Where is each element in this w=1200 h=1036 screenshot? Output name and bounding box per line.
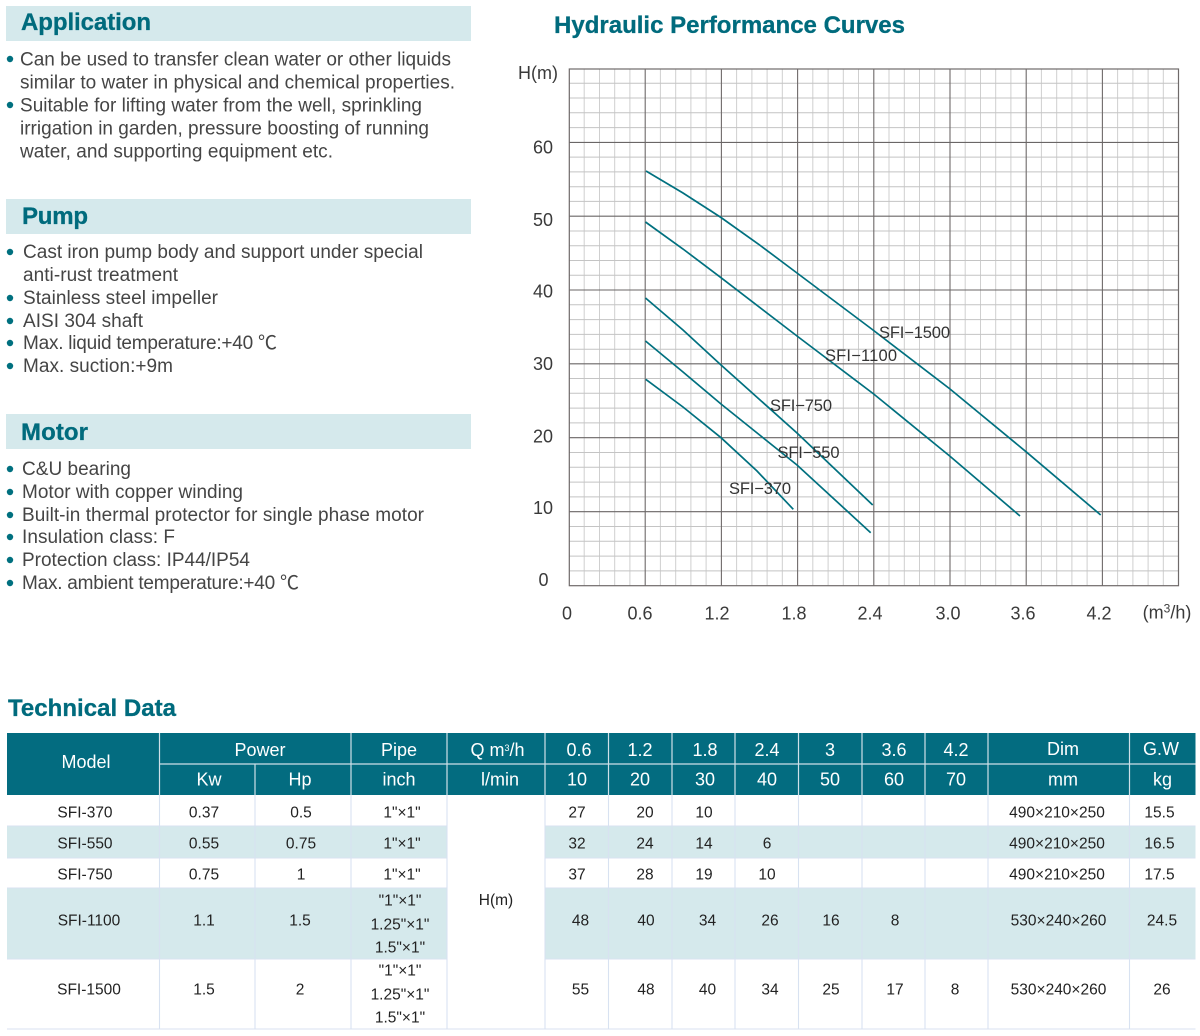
table header: 4.2 [943, 740, 969, 760]
row: SFI-1500: 2 [296, 982, 304, 998]
curve labels: SFI−750 [770, 397, 832, 415]
row: SFI-1100: 8 [891, 912, 899, 930]
row: SFI-1500: "1"×1" [379, 962, 421, 980]
row: SFI-1500: 1.5 [193, 982, 215, 998]
pump heading [6, 199, 471, 234]
row: SFI-1500: 55 [572, 982, 589, 998]
curve: SFI-370 [646, 379, 793, 509]
curve labels: SFI−370 [729, 480, 791, 498]
row: SFI-1100: 1.1 [193, 912, 215, 930]
panel: motor [6, 414, 471, 594]
x axis labels: 0.6 [627, 604, 653, 624]
row: SFI-1100: 48 [572, 912, 589, 930]
row: SFI-1500: 530×240×260 [1011, 982, 1107, 998]
chart title: Hydraulic Performance Curves [554, 12, 905, 39]
y axis labels: 50 [533, 210, 553, 230]
x axis labels: /h) [1170, 602, 1191, 622]
motor bullet list: C&U bearing [22, 459, 131, 480]
y axis labels [518, 63, 558, 590]
row: SFI-550: 490×210×250 [1009, 836, 1105, 852]
row: SFI-750: 1 [297, 866, 305, 884]
x axis labels: 0 [562, 604, 572, 624]
x axis labels: 2.4 [857, 604, 883, 624]
table header: 1.8 [692, 740, 718, 760]
table header: inch [382, 770, 416, 790]
row: SFI-370: 27 [568, 804, 586, 822]
table header: 3 [504, 743, 510, 753]
row: SFI-1100: 24.5 [1147, 912, 1177, 930]
table title: Technical Data [8, 695, 177, 722]
y axis labels: 10 [533, 498, 553, 518]
H(m) merged cell: H(m) [479, 892, 513, 909]
row: SFI-1100: 40 [637, 912, 655, 930]
row: SFI-370: 490×210×250 [1009, 804, 1105, 822]
table header: Model [61, 752, 111, 772]
curve labels [729, 324, 950, 498]
row: SFI-1500: SFI-1500 [57, 982, 121, 998]
row: SFI-750: 19 [695, 866, 713, 884]
table header: Hp [288, 770, 312, 790]
chart: hydraulic performance curves [518, 63, 1191, 624]
table header: Power [234, 740, 286, 760]
motor bullet list: Max. ambient temperature:+40 ℃ [22, 573, 299, 594]
row: SFI-370 [57, 804, 1175, 822]
row: SFI-1500: 8 [951, 982, 959, 998]
row: SFI-750: SFI-750 [57, 866, 113, 884]
y axis labels: 40 [533, 282, 553, 302]
row: SFI-750: 28 [636, 866, 654, 884]
curve: SFI-750 [646, 298, 873, 505]
motor bullet list: Insulation class: F [22, 527, 175, 548]
row: SFI-370: 0.5 [290, 804, 312, 822]
table header: 20 [630, 770, 650, 790]
motor bullet list: Protection class: IP44/IP54 [22, 550, 250, 571]
row: SFI-1100: 16 [822, 912, 840, 930]
x axis labels [562, 602, 1191, 624]
table header: 2.4 [754, 740, 780, 760]
pump bullet list: Max. liquid temperature:+40 ℃ [23, 333, 277, 354]
y axis labels: H(m) [518, 63, 558, 83]
application bullet list: similar to water in physical and chemical properties. [20, 72, 455, 94]
table header: G.W [1143, 739, 1179, 759]
table header [7, 733, 1196, 795]
pump bullet list: anti-rust treatment [23, 265, 179, 286]
x axis labels: (m [1143, 602, 1164, 622]
table header: 10 [567, 770, 587, 790]
table header: 50 [820, 770, 840, 790]
table header: 1.2 [627, 740, 653, 760]
application bullet list: Can be used to transfer clean water or other liquids [20, 50, 451, 70]
row: SFI-1100: 530×240×260 [1011, 912, 1107, 930]
row: SFI-1500: 40 [699, 982, 716, 998]
pump bullet list [7, 242, 423, 377]
row: SFI-550: 14 [695, 836, 713, 852]
chart grid [569, 69, 1178, 586]
x axis labels: 4.2 [1086, 604, 1112, 624]
row: SFI-1100: 1.5"×1" [375, 940, 425, 956]
row: SFI-1500: 1.25"×1" [371, 986, 429, 1004]
row: SFI-750: 490×210×250 [1009, 866, 1105, 884]
motor bullet list: Built-in thermal protector for single phase motor [22, 505, 425, 526]
application bullet list: water, and supporting equipment etc. [19, 142, 333, 162]
row: SFI-550: 6 [763, 836, 771, 852]
y axis labels: 0 [538, 570, 549, 590]
row: SFI-550: 16.5 [1144, 836, 1175, 852]
row: SFI-1100: 1.25"×1" [371, 916, 429, 934]
row: SFI-550 [57, 836, 1175, 852]
row: SFI-1500: 1.5"×1" [375, 1010, 425, 1026]
curve labels: SFI−1500 [879, 324, 950, 342]
x axis labels: 3 [1164, 602, 1171, 616]
row: SFI-1100: 26 [761, 912, 779, 930]
panel: application [6, 6, 471, 162]
table header: kg [1153, 770, 1172, 790]
table header: 3.6 [881, 740, 907, 760]
pump bullet list: Stainless steel impeller [23, 288, 219, 309]
table: technical data [7, 733, 1196, 1029]
table header: 30 [695, 770, 715, 790]
application bullet list: Suitable for lifting water from the well, sprinkling [20, 96, 422, 116]
curve labels: SFI−1100 [825, 347, 897, 365]
row: SFI-1100: 1.5 [289, 912, 311, 930]
row: SFI-750: 0.75 [189, 866, 219, 884]
motor heading: Motor [21, 419, 88, 446]
y axis labels: 30 [533, 354, 553, 374]
table header: 70 [946, 770, 966, 790]
table header: Dim [1047, 739, 1079, 759]
table header: 60 [884, 770, 904, 790]
table header: l/min [481, 770, 519, 790]
row: SFI-1500 [57, 962, 1171, 1026]
panel: pump [6, 199, 471, 377]
application bullet list [7, 50, 455, 162]
row: SFI-750: 1"×1" [383, 866, 421, 884]
row: SFI-1100: SFI-1100 [58, 912, 121, 930]
row: SFI-370: 15.5 [1144, 804, 1175, 822]
row: SFI-370: 1"×1" [383, 804, 421, 822]
row: SFI-750 [57, 866, 1175, 884]
row: SFI-550: 0.75 [286, 836, 316, 852]
row: SFI-370: SFI-370 [57, 804, 113, 822]
row: SFI-750: 17.5 [1144, 866, 1175, 884]
row: SFI-550: 1"×1" [383, 836, 421, 852]
x axis labels: 3.0 [935, 604, 961, 624]
table header: 3 [825, 740, 835, 760]
row: SFI-550: 0.55 [189, 836, 219, 852]
curve: SFI-1500 [646, 171, 1101, 515]
row: SFI-550: 32 [568, 836, 586, 852]
row: SFI-550: 24 [636, 836, 654, 852]
table header: Q m [470, 740, 504, 760]
application heading [6, 6, 471, 41]
motor bullet list [7, 459, 425, 594]
table header: 0.6 [566, 740, 592, 760]
curve: SFI-550 [646, 341, 871, 533]
y axis labels: 60 [533, 138, 553, 158]
pump heading: Pump [22, 203, 88, 230]
x axis labels: 1.2 [704, 604, 730, 624]
motor heading [6, 414, 471, 449]
pump bullet list: Max. suction:+9m [23, 356, 173, 377]
row: SFI-1100 [58, 892, 1177, 956]
table row bands and lines [7, 795, 1196, 1029]
row: SFI-370: 0.37 [189, 804, 219, 822]
table header: mm [1048, 770, 1078, 790]
curve: SFI-1100 [646, 222, 1020, 516]
row: SFI-750: 10 [758, 866, 776, 884]
table header: Pipe [381, 740, 417, 760]
row: SFI-370: 10 [695, 804, 713, 822]
y axis labels: 20 [533, 426, 553, 446]
table header: 40 [757, 770, 777, 790]
row: SFI-1500: 17 [886, 982, 904, 998]
row: SFI-750: 37 [568, 866, 586, 884]
row: SFI-1500: 26 [1153, 982, 1171, 998]
application heading: Application [21, 9, 151, 36]
curve labels: SFI−550 [778, 444, 840, 462]
application bullet list: irrigation in garden, pressure boosting of running [20, 118, 429, 140]
table header: Kw [196, 770, 222, 790]
row: SFI-1500: 48 [637, 982, 655, 998]
row: SFI-550: SFI-550 [57, 836, 113, 852]
x axis labels: 3.6 [1010, 604, 1036, 624]
pump bullet list: Cast iron pump body and support under special [23, 242, 423, 263]
row: SFI-1100: "1"×1" [379, 892, 421, 910]
row: SFI-1100: 34 [699, 912, 716, 930]
pump bullet list: AISI 304 shaft [23, 311, 144, 332]
row: SFI-1500: 34 [761, 982, 779, 998]
table header: /h [510, 740, 525, 760]
motor bullet list: Motor with copper winding [22, 482, 243, 503]
x axis labels: 1.8 [781, 604, 807, 624]
row: SFI-370: 20 [636, 804, 654, 822]
row: SFI-1500: 25 [822, 982, 840, 998]
